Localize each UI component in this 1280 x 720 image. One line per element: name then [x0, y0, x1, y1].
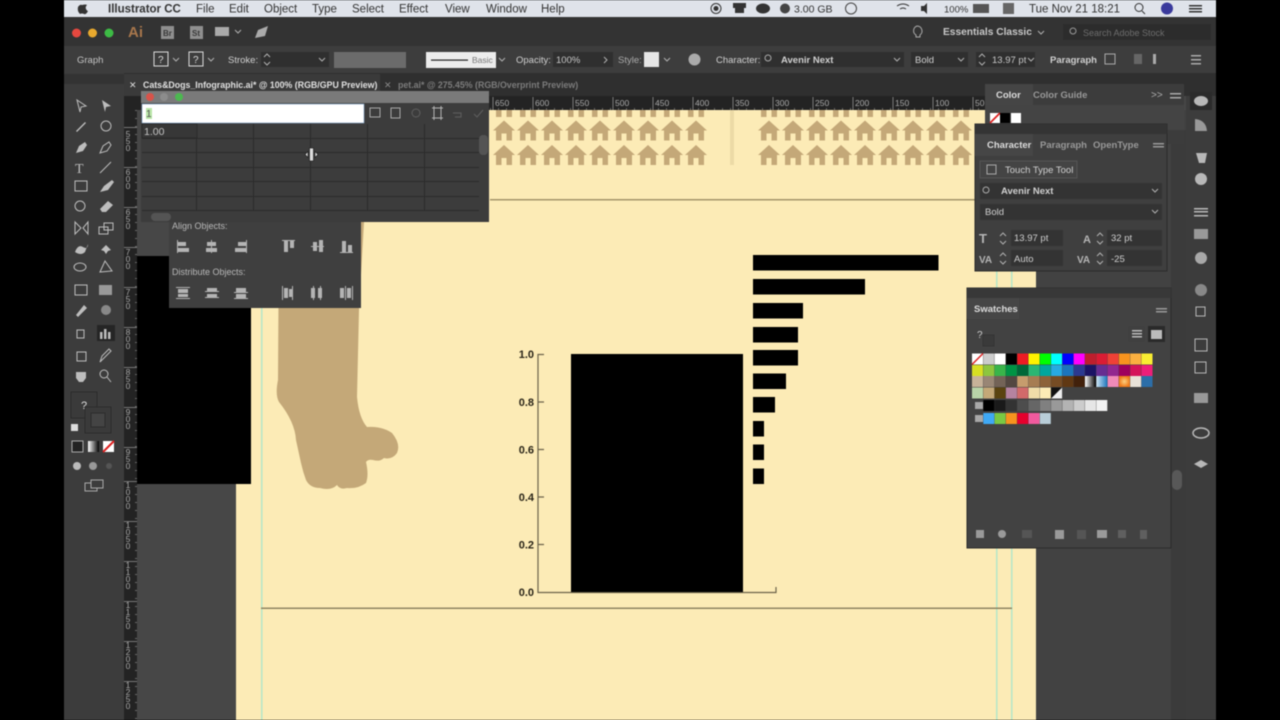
- macOS menu bar: Help: [541, 4, 565, 16]
- application title bar: [64, 17, 1216, 46]
- left ruler: 1: [126, 567, 131, 577]
- y axis labels: 1.0: [519, 349, 534, 361]
- left ruler: 0: [126, 654, 131, 664]
- control bar: ?: [193, 55, 199, 66]
- left ruler: 0: [126, 254, 131, 264]
- macOS menu bar: 3.00 GB: [794, 4, 833, 16]
- left ruler: 8: [126, 327, 131, 337]
- swatch grid: [972, 354, 1152, 424]
- left ruler: 5: [126, 534, 131, 544]
- macOS menu bar: 100%: [944, 4, 969, 16]
- graph data window: [141, 91, 489, 222]
- top ruler: 300: [775, 98, 789, 108]
- top ruler: 200: [855, 98, 869, 108]
- character fields: -25: [1111, 254, 1125, 265]
- graph window toolbar icons: [370, 106, 483, 120]
- selected data cell: 1.00: [144, 126, 165, 138]
- application title bar: Ai: [128, 24, 143, 41]
- align objects panel: Distribute Objects:: [172, 267, 246, 277]
- right side dock background: [1036, 84, 1216, 720]
- top ruler: 600: [535, 98, 549, 108]
- fill and stroke indicator: ?: [81, 400, 87, 412]
- y axis labels: 0.8: [519, 397, 534, 409]
- application title bar: Search Adobe Stock: [1083, 28, 1165, 38]
- font family field: Avenir Next: [1001, 186, 1054, 197]
- left ruler: 0: [126, 181, 131, 191]
- control bar: Avenir Next: [781, 55, 834, 66]
- data entry field: 1: [146, 109, 152, 120]
- macOS menu bar: Tue Nov 21 18:21: [1029, 4, 1120, 16]
- character fields: [979, 230, 1162, 266]
- color panel: [985, 84, 1184, 144]
- horizontal black bars: [753, 255, 938, 484]
- character panel: OpenType: [1093, 140, 1139, 151]
- left tools panel: [64, 73, 124, 720]
- left ruler: 0: [126, 701, 131, 711]
- color panel: >>: [1151, 90, 1163, 101]
- left ruler: 9: [126, 407, 131, 417]
- character fields: VA: [979, 255, 992, 266]
- left ruler: 5: [126, 129, 131, 139]
- character fields: 13.97 pt: [1014, 233, 1049, 244]
- macOS menu bar: Effect: [399, 4, 429, 16]
- left ruler: 0: [126, 661, 131, 671]
- left ruler: 6: [126, 207, 131, 217]
- top ruler: 650: [495, 98, 509, 108]
- control bar: Character:: [716, 55, 760, 66]
- top ruler: 500: [615, 98, 629, 108]
- left ruler: 0: [126, 581, 131, 591]
- black placeholder rectangle: [137, 256, 251, 484]
- macOS menu bar: File: [196, 4, 215, 16]
- fill and stroke indicator: [71, 392, 114, 491]
- character fields: Auto: [1014, 254, 1034, 265]
- left ruler: 1: [126, 640, 131, 650]
- font family field: [980, 183, 1162, 199]
- top ruler: [137, 96, 1036, 110]
- left ruler: 2: [126, 687, 131, 697]
- left ruler: 0: [126, 301, 131, 311]
- data entry field: [142, 104, 364, 123]
- control bar: ?: [158, 55, 164, 66]
- house pictogram rows: [493, 110, 972, 165]
- character panel: Paragraph: [1040, 140, 1087, 151]
- left ruler: 0: [126, 341, 131, 351]
- left ruler: 5: [126, 136, 131, 146]
- left ruler: 7: [126, 247, 131, 257]
- left ruler: 0: [126, 527, 131, 537]
- top ruler: 100: [935, 98, 949, 108]
- left ruler: 5: [126, 294, 131, 304]
- left ruler: 0: [126, 574, 131, 584]
- left ruler: [124, 96, 137, 720]
- left ruler: 0: [126, 487, 131, 497]
- document tabs: [64, 73, 1216, 96]
- bar chart: axis, column and stacked bars: [519, 255, 938, 599]
- left ruler: 0: [126, 494, 131, 504]
- document tabs: pet.ai* @ 275.45% (RGB/Overprint Preview): [398, 80, 578, 90]
- canvas: artboard: [236, 110, 1036, 720]
- y axis: [538, 354, 776, 592]
- left ruler: 1: [126, 560, 131, 570]
- left ruler: 0: [126, 261, 131, 271]
- y axis labels: 0.2: [519, 540, 534, 552]
- character fields: T: [979, 231, 987, 246]
- left ruler: 5: [126, 694, 131, 704]
- macOS menu bar: Illustrator CC: [108, 4, 181, 16]
- document tabs: ✕: [129, 80, 137, 90]
- left ruler: 0: [126, 414, 131, 424]
- top ruler: 250: [815, 98, 829, 108]
- scrollbars: [151, 135, 488, 221]
- top ruler: 400: [695, 98, 709, 108]
- data grid: [142, 124, 479, 211]
- y axis labels: 0.6: [519, 444, 534, 456]
- y axis labels: 0.0: [519, 587, 534, 599]
- application title bar: St: [192, 29, 200, 38]
- macOS menu bar: View: [445, 4, 470, 16]
- swatches panel: Swatches: [974, 304, 1018, 315]
- character fields: A: [1083, 234, 1091, 246]
- left ruler: 1: [126, 520, 131, 530]
- left ruler: 8: [126, 367, 131, 377]
- left ruler: 0: [126, 221, 131, 231]
- left ruler: 5: [126, 454, 131, 464]
- right dock icons: [1190, 92, 1212, 472]
- control bar: Basic: [472, 55, 494, 65]
- cat paw illustration: [277, 222, 398, 489]
- macOS menu bar: Object: [264, 4, 298, 16]
- control bar: [64, 46, 1216, 73]
- top ruler: 150: [895, 98, 909, 108]
- character fields: 32 pt: [1111, 233, 1132, 244]
- application title bar: Essentials Classic: [943, 27, 1032, 38]
- document tabs: Cats&Dogs_Infographic.ai* @ 100% (RGB/GPU Preview): [143, 80, 377, 90]
- left ruler: 0: [126, 381, 131, 391]
- character fields: VA: [1077, 255, 1090, 266]
- color panel: Color: [996, 90, 1021, 101]
- left ruler: 0: [126, 334, 131, 344]
- top ruler: 450: [655, 98, 669, 108]
- control bar: Opacity:: [516, 55, 551, 66]
- left ruler: 0: [126, 421, 131, 431]
- left ruler: 1: [126, 680, 131, 690]
- align objects panel: [169, 221, 361, 308]
- control bar: Style:: [618, 55, 642, 66]
- macOS menu bar: Select: [352, 4, 385, 16]
- y axis labels: 0.4: [519, 492, 535, 504]
- character panel: [975, 124, 1167, 271]
- left ruler: 6: [126, 167, 131, 177]
- left ruler: 1: [126, 480, 131, 490]
- macOS menu bar: [64, 0, 1216, 17]
- control bar: Bold: [915, 55, 934, 66]
- left ruler: 5: [126, 614, 131, 624]
- left ruler: 1: [126, 607, 131, 617]
- swatches panel: [967, 288, 1171, 548]
- align icons: [176, 240, 353, 300]
- application title bar: Br: [163, 29, 172, 38]
- macOS menu bar: Edit: [229, 4, 250, 16]
- left ruler: 1: [126, 600, 131, 610]
- control bar: Graph: [77, 55, 103, 66]
- control bar: Paragraph: [1050, 55, 1097, 66]
- left ruler: 0: [126, 541, 131, 551]
- left ruler: 0: [126, 174, 131, 184]
- main black column: [571, 354, 743, 592]
- touch type button: Touch Type Tool: [1005, 165, 1073, 176]
- left ruler: 0: [126, 461, 131, 471]
- left ruler: 2: [126, 647, 131, 657]
- tool icons: [74, 100, 115, 382]
- document tabs: ✕: [384, 80, 392, 90]
- left ruler: 9: [126, 447, 131, 457]
- control bar: 100%: [556, 55, 581, 66]
- left ruler: 5: [126, 374, 131, 384]
- tool icons: T: [75, 162, 84, 177]
- left ruler: 0: [126, 143, 131, 153]
- macOS menu bar: Window: [486, 4, 528, 16]
- color panel: Color Guide: [1033, 90, 1087, 101]
- macOS menu bar: Type: [312, 4, 337, 16]
- top ruler: 350: [735, 98, 749, 108]
- font style field: Bold: [985, 207, 1004, 218]
- control bar: 13.97 pt: [992, 55, 1027, 66]
- left ruler: 7: [126, 287, 131, 297]
- swatches panel: ?: [977, 330, 983, 341]
- font style field: [980, 204, 1162, 220]
- align objects panel: Align Objects:: [172, 221, 228, 231]
- swatches footer icons: [976, 530, 1147, 539]
- column resize cursor: [305, 148, 318, 161]
- top ruler: 50: [975, 98, 985, 108]
- left ruler: 5: [126, 214, 131, 224]
- top ruler: 550: [575, 98, 589, 108]
- character panel: Character: [987, 140, 1032, 151]
- selected data cell: [142, 124, 197, 138]
- left ruler: 0: [126, 621, 131, 631]
- y axis labels: [519, 349, 535, 599]
- touch type button: [980, 161, 1077, 178]
- control bar: Stroke:: [228, 55, 258, 66]
- left ruler: 0: [126, 501, 131, 511]
